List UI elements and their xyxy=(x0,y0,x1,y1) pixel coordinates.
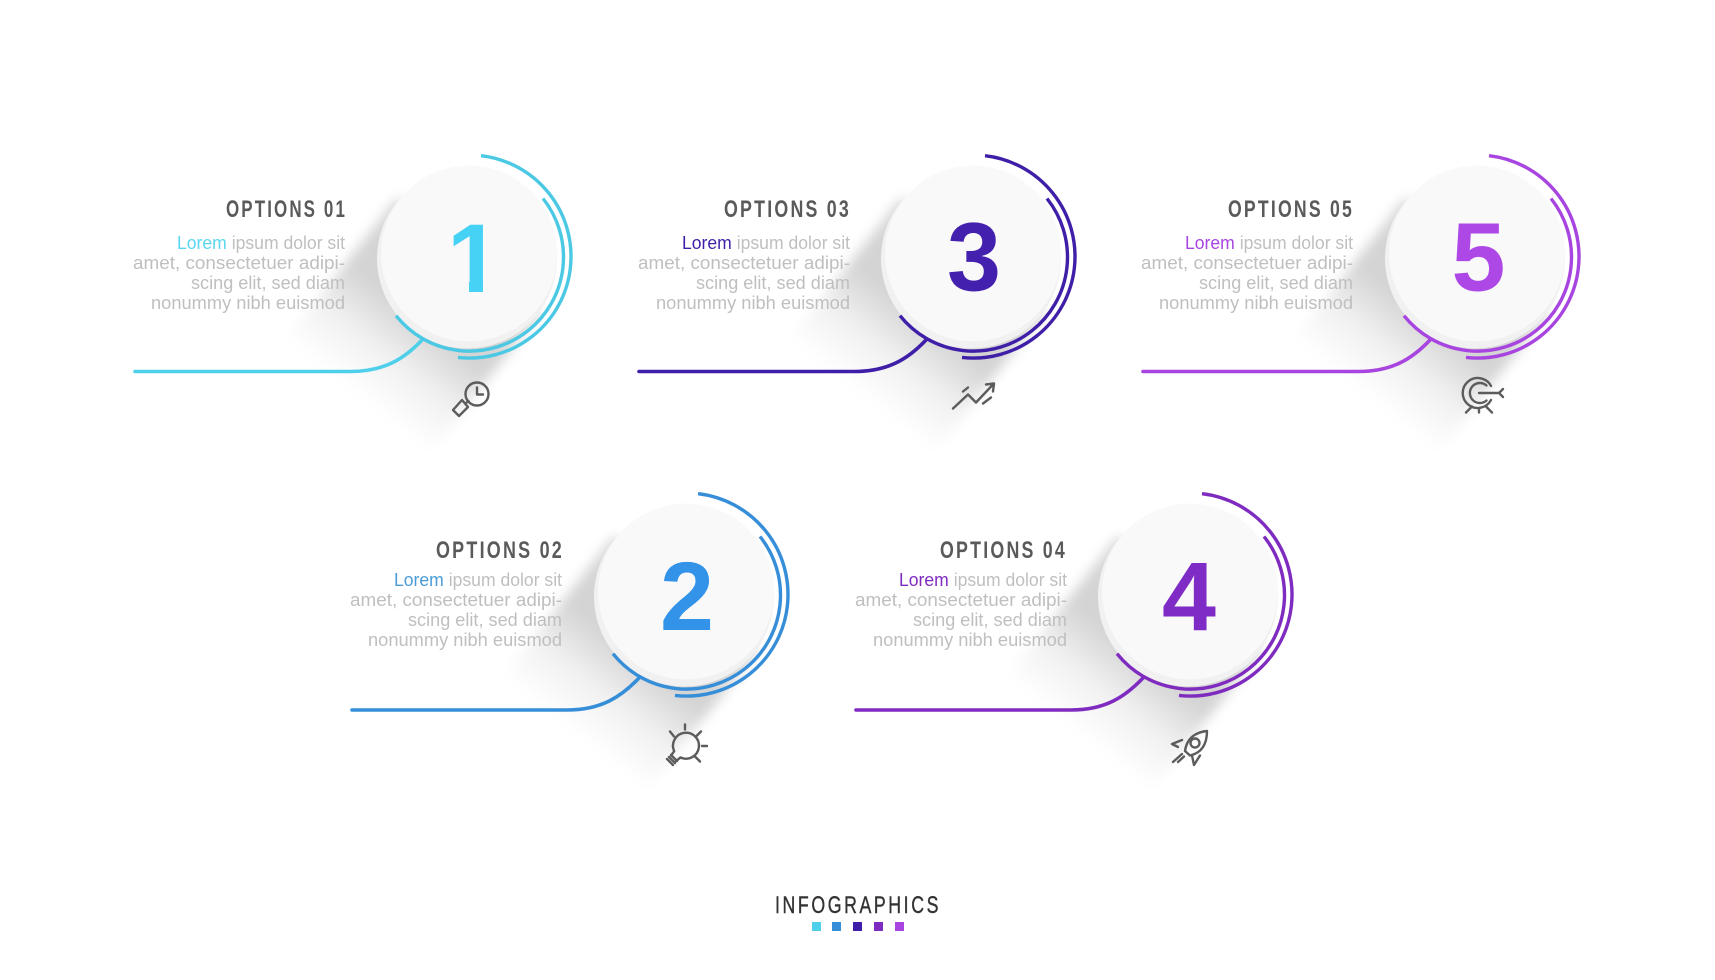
body text: nonummy nibh euismod xyxy=(656,293,850,313)
body text: Lorem ipsum dolor sit xyxy=(177,233,345,253)
body text: amet, consectetuer adipi- xyxy=(1141,253,1353,273)
body text: amet, consectetuer adipi- xyxy=(855,590,1067,610)
heading: OPTIONS 05 xyxy=(1228,196,1354,223)
body text: amet, consectetuer adipi- xyxy=(133,253,345,273)
body text: scing elit, sed diam xyxy=(191,273,345,293)
long shadow xyxy=(784,198,1045,460)
panel: option 03 xyxy=(638,156,1075,460)
long shadow xyxy=(1001,536,1262,798)
footer: infographics title xyxy=(775,892,941,931)
body text: nonummy nibh euismod xyxy=(151,293,345,313)
panel: option 05 xyxy=(1141,156,1579,460)
body text: nonummy nibh euismod xyxy=(873,630,1067,650)
icon: growth arrow xyxy=(953,384,994,408)
circle disc xyxy=(881,166,1061,348)
body text: nonummy nibh euismod xyxy=(1159,293,1353,313)
connector line xyxy=(639,340,926,372)
number: 5 xyxy=(1452,202,1505,312)
arcs xyxy=(1404,156,1579,358)
connector line xyxy=(856,678,1143,710)
body text: scing elit, sed diam xyxy=(408,610,562,630)
heading: OPTIONS 01 xyxy=(226,196,347,223)
connector line xyxy=(352,678,639,710)
heading: OPTIONS 03 xyxy=(724,196,851,223)
arcs xyxy=(900,156,1075,358)
panel: option 02 xyxy=(350,494,788,798)
body text: scing elit, sed diam xyxy=(696,273,850,293)
body text xyxy=(133,233,345,313)
body text: amet, consectetuer adipi- xyxy=(350,590,562,610)
body text: Lorem ipsum dolor sit xyxy=(394,570,562,590)
body text xyxy=(1141,233,1353,313)
body text xyxy=(638,233,850,313)
circle disc xyxy=(377,166,557,348)
panel: option 01 xyxy=(133,154,573,422)
footer heading: INFOGRAPHICS xyxy=(775,892,941,919)
icon: target xyxy=(1463,378,1503,412)
colour squares xyxy=(812,922,904,931)
body text xyxy=(350,570,562,650)
number: 2 xyxy=(660,542,714,651)
long shadow xyxy=(280,198,541,460)
icon: magnifier clock xyxy=(453,382,488,416)
connector line xyxy=(135,340,422,372)
long shadow xyxy=(1288,198,1549,460)
body text: Lorem ipsum dolor sit xyxy=(682,233,850,253)
body text: nonummy nibh euismod xyxy=(368,630,562,650)
panel: option 04 xyxy=(855,494,1292,798)
arcs xyxy=(396,156,571,358)
number: 4 xyxy=(1162,542,1216,651)
heading: OPTIONS 02 xyxy=(436,537,564,564)
body text: Lorem ipsum dolor sit xyxy=(1185,233,1353,253)
heading: OPTIONS 04 xyxy=(940,537,1067,564)
long shadow xyxy=(497,536,758,798)
body text xyxy=(855,570,1067,650)
number: 1 xyxy=(447,204,501,313)
arcs xyxy=(1117,494,1292,696)
circle disc xyxy=(594,504,774,686)
body text: scing elit, sed diam xyxy=(913,610,1067,630)
circle disc xyxy=(1385,166,1565,348)
icon: rocket xyxy=(1172,731,1207,765)
arcs xyxy=(613,494,788,696)
body text: Lorem ipsum dolor sit xyxy=(899,570,1067,590)
body text: amet, consectetuer adipi- xyxy=(638,253,850,273)
number: 3 xyxy=(947,202,1001,312)
circle disc xyxy=(1098,504,1278,686)
icon: light bulb xyxy=(667,724,707,765)
connector line xyxy=(1143,340,1430,372)
body text: scing elit, sed diam xyxy=(1199,273,1353,293)
